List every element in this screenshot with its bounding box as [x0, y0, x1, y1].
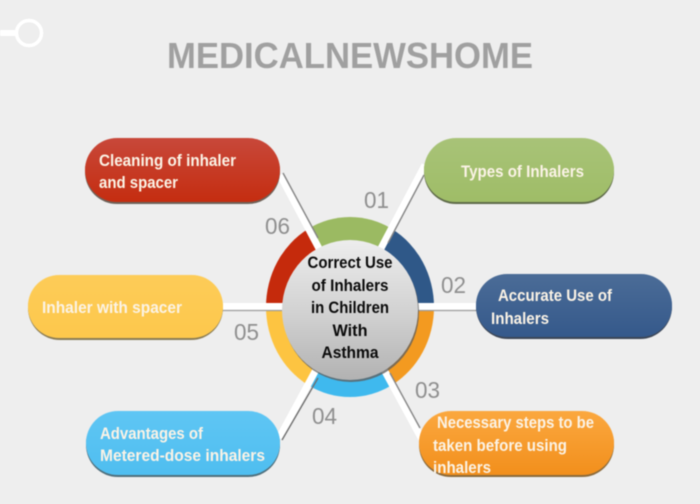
center circle: in Children — [311, 299, 389, 317]
center circle — [282, 240, 419, 382]
pill: necessary steps — [419, 411, 614, 477]
pill: types of inhalers: Types of Inhalers — [461, 163, 584, 181]
pill: advantages of metered-dose inhalers — [86, 411, 280, 477]
diagram: ring segments — [266, 217, 434, 397]
number 03: 03 — [415, 377, 440, 403]
center circle: Correct Use — [308, 254, 392, 272]
pill: necessary steps: taken before using — [433, 437, 567, 455]
pill: cleaning of inhaler and spacer: Cleaning of inhaler — [99, 152, 237, 170]
pill: necessary steps: Necessary steps to be — [437, 414, 594, 432]
pill: inhaler with spacer: Inhaler with spacer — [42, 299, 183, 317]
number 01: 01 — [364, 187, 389, 213]
pill: accurate use of inhalers: Accurate Use of — [498, 287, 612, 305]
center circle: Asthma — [322, 344, 379, 362]
pill: accurate use of inhalers — [476, 274, 672, 339]
pill: accurate use of inhalers: Inhalers — [491, 310, 549, 328]
center circle: of Inhalers — [312, 277, 388, 295]
pill: necessary steps: inhalers — [433, 459, 491, 477]
number 04: 04 — [312, 403, 337, 429]
pill: advantages of metered-dose inhalers: Advantages of — [100, 425, 203, 443]
number 02: 02 — [441, 272, 466, 298]
pill: types of inhalers — [424, 138, 614, 204]
connector spokes — [222, 165, 478, 445]
title: MEDICALNEWSHOME — [167, 35, 533, 76]
pill: cleaning of inhaler and spacer — [85, 138, 280, 204]
pill: inhaler with spacer — [28, 275, 223, 340]
number 05: 05 — [234, 319, 259, 345]
center circle: With — [332, 322, 368, 340]
pill: cleaning of inhaler and spacer: and spacer — [99, 174, 179, 192]
pill: advantages of metered-dose inhalers: Metered-dose inhalers — [100, 447, 265, 465]
logo: key ring — [0, 20, 42, 46]
number 06: 06 — [265, 213, 290, 239]
